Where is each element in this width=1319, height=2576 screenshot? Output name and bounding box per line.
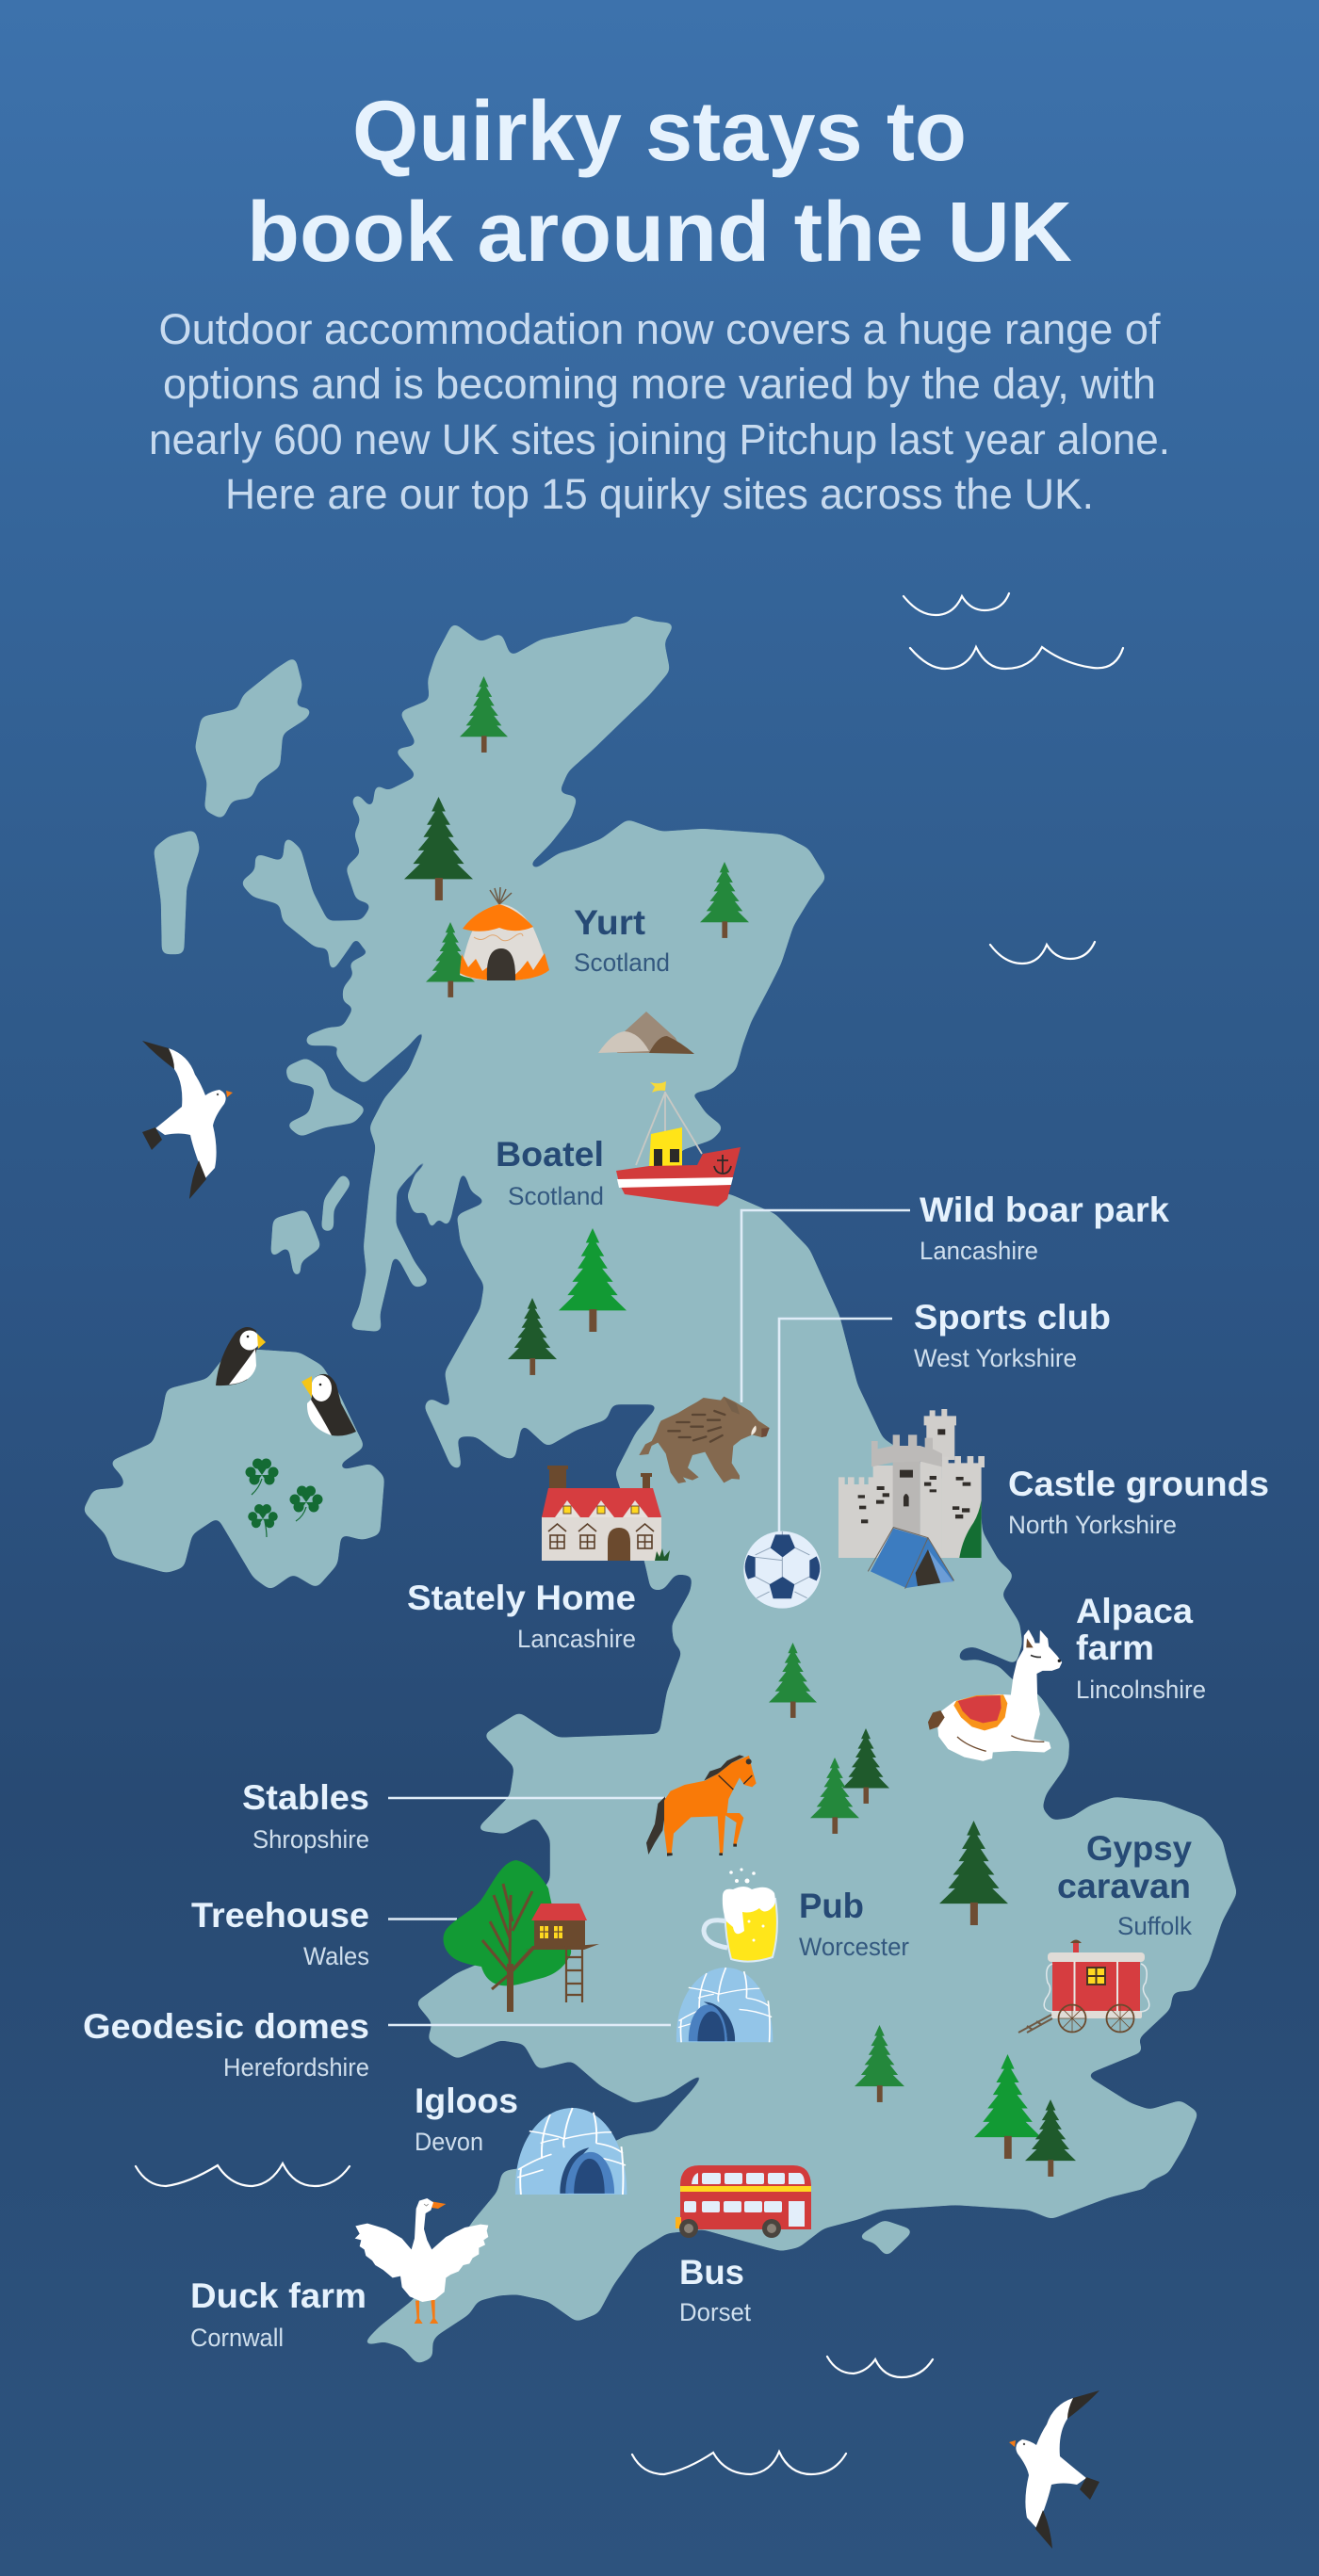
label: Alpaca farm: farm: [1076, 1628, 1154, 1667]
label: Yurt: [574, 903, 670, 977]
label: Castle grounds: Castle grounds: [1008, 1465, 1269, 1503]
inner Hebrides islands: [240, 835, 364, 974]
intro paragraph: nearly 600 new UK sites joining Pitchup last year alone.: [149, 415, 1170, 463]
label: Wild boar park: [920, 1191, 1169, 1265]
icon: igloo: [515, 2108, 627, 2195]
label: Igloos: Devon: [415, 2128, 483, 2156]
label: Pub: Pub: [799, 1887, 864, 1925]
icon: football: [743, 1531, 821, 1609]
icon: treehouse: [444, 1860, 599, 2012]
label: Duck farm: Cornwall: [190, 2324, 284, 2352]
title: Quirky stays to: [352, 85, 967, 179]
icon: horse: [646, 1755, 757, 1856]
label: Stately Home: Stately Home: [407, 1579, 636, 1617]
label: Gypsy caravan: [1057, 1829, 1193, 1940]
intro paragraph: options and is becoming more varied by the day, with: [163, 360, 1156, 408]
label: Gypsy caravan: Suffolk: [1117, 1912, 1193, 1940]
label: Boatel: Boatel: [496, 1135, 604, 1174]
intro paragraph: [149, 305, 1170, 518]
icon: bus: [676, 2165, 811, 2238]
sea waves: [136, 593, 1123, 2474]
label: Treehouse: [191, 1896, 369, 1970]
label: Geodesic domes: [83, 2007, 369, 2082]
icon: castle with tent: [839, 1409, 985, 1589]
label: Alpaca farm: Lincolnshire: [1076, 1676, 1206, 1704]
label: Gypsy caravan: Gypsy: [1086, 1829, 1192, 1868]
label: Treehouse: Treehouse: [191, 1896, 369, 1935]
icon: geodesic dome: [676, 1968, 773, 2042]
label: Igloos: [415, 2082, 518, 2156]
icon: stately home: [542, 1466, 670, 1561]
label: Geodesic domes: Geodesic domes: [83, 2007, 369, 2046]
icon: shamrocks: [245, 1458, 322, 1537]
label: Sports club: West Yorkshire: [914, 1344, 1077, 1372]
forest trees: [404, 676, 1076, 2177]
Northern Ireland: [83, 1350, 384, 1590]
intro paragraph: Here are our top 15 quirky sites across the UK.: [225, 470, 1094, 518]
mainland Great Britain: [306, 615, 1237, 2364]
label: Yurt: Yurt: [574, 903, 645, 942]
icon: beer: [704, 1868, 777, 1962]
label: Wild boar park: Lancashire: [920, 1237, 1038, 1265]
label: Sports club: Sports club: [914, 1298, 1111, 1337]
label: Geodesic domes: Herefordshire: [223, 2053, 369, 2082]
icon: wild boar: [639, 1397, 770, 1483]
icon: boat: [616, 1081, 741, 1207]
icon: seagull top left: [142, 1041, 233, 1199]
label: Stately Home: [407, 1579, 636, 1653]
label: Gypsy caravan: caravan: [1057, 1867, 1191, 1905]
label: Stables: [242, 1778, 369, 1854]
label: Boatel: [496, 1135, 604, 1210]
icon: goose: [355, 2198, 488, 2324]
intro paragraph: Outdoor accommodation now covers a huge range of: [158, 305, 1161, 353]
Isle of Wight: [856, 2220, 914, 2257]
label: Castle grounds: [1008, 1465, 1269, 1539]
label: Pub: Worcester: [799, 1933, 909, 1961]
label: Duck farm: [190, 2276, 366, 2352]
connector lines: [388, 1210, 910, 2025]
icon: puffin south: [301, 1374, 356, 1435]
label: Duck farm: Duck farm: [190, 2276, 366, 2315]
icon: alpaca: [928, 1630, 1062, 1760]
label: Bus: Dorset: [679, 2298, 752, 2326]
label: Yurt: Scotland: [574, 948, 670, 977]
icon: puffin north: [216, 1327, 266, 1385]
label: Wild boar park: Wild boar park: [920, 1191, 1169, 1229]
label: Stately Home: Lancashire: [517, 1625, 636, 1653]
title: [247, 85, 1072, 280]
map of the UK: [83, 615, 1237, 2364]
label: Bus: [679, 2253, 752, 2326]
icon: yurt: [460, 887, 549, 980]
label: Castle grounds: North Yorkshire: [1008, 1511, 1177, 1539]
label: Alpaca farm: [1076, 1592, 1206, 1704]
label: Boatel: Scotland: [508, 1182, 604, 1210]
icon: gypsy caravan: [1018, 1940, 1149, 2033]
icon: mountains: [598, 1012, 694, 1054]
label: Treehouse: Wales: [303, 1942, 369, 1970]
title: book around the UK: [247, 186, 1072, 280]
label: Bus: Bus: [679, 2253, 744, 2292]
label: Alpaca farm: Alpaca: [1076, 1592, 1193, 1630]
label: Sports club: [914, 1298, 1111, 1372]
icon: seagull bottom right: [1009, 2390, 1099, 2549]
label: Pub: [799, 1887, 909, 1961]
label: Stables: Shropshire: [252, 1825, 369, 1854]
label: Stables: Stables: [242, 1778, 369, 1817]
outer Hebrides: [195, 656, 313, 819]
label: Igloos: Igloos: [415, 2082, 518, 2120]
